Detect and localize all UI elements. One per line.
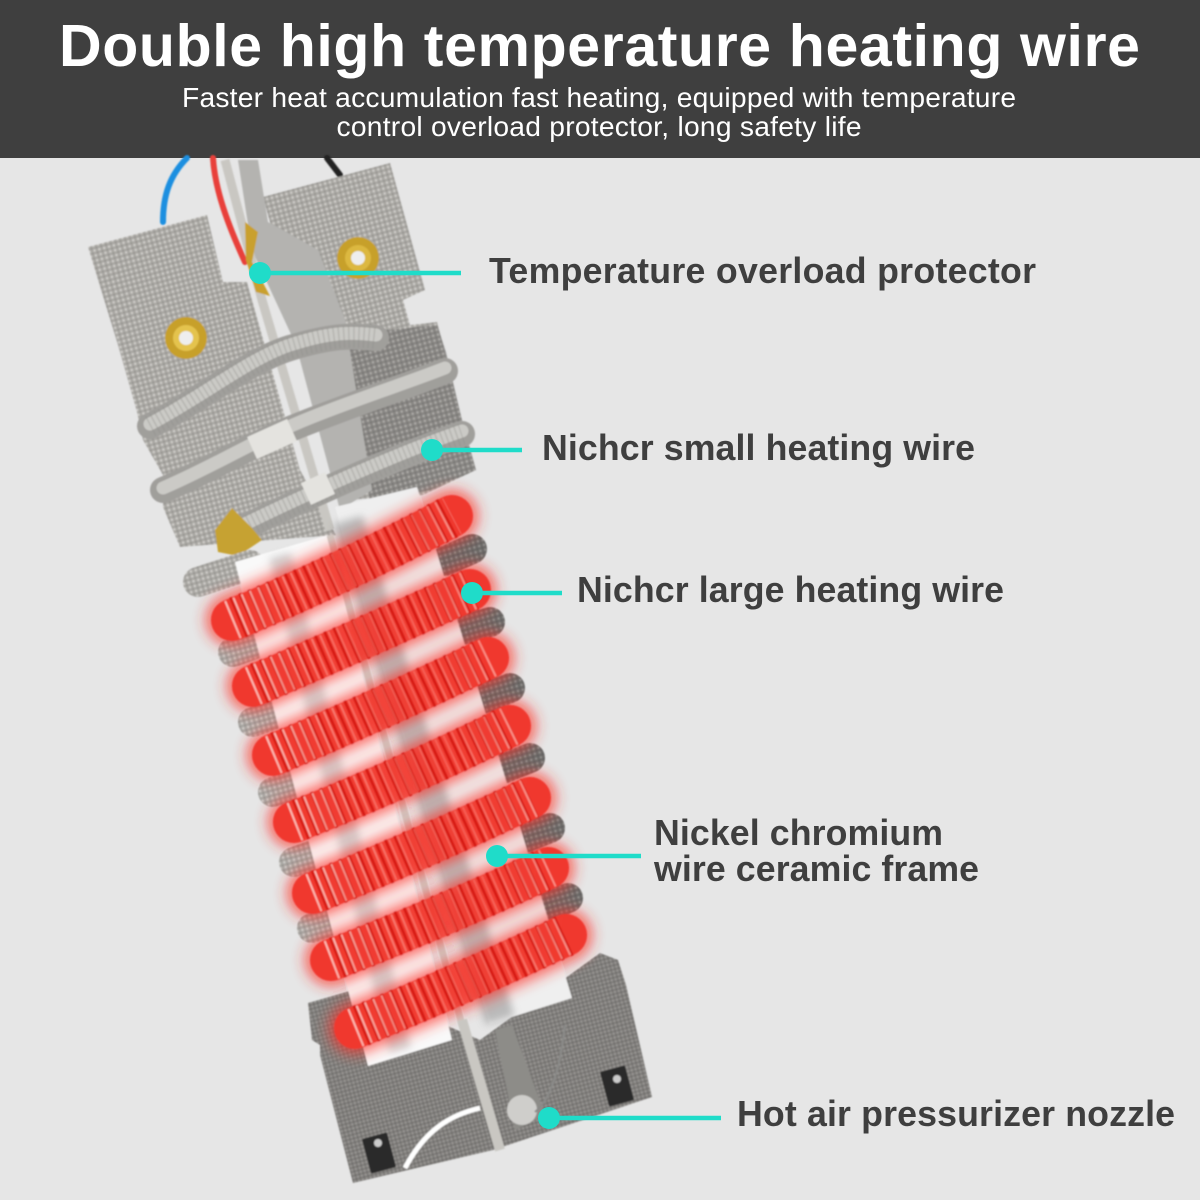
wires bbox=[163, 158, 340, 262]
header band bbox=[0, 0, 1200, 158]
subtitle: Faster heat accumulation fast heating, equipped with temperature bbox=[182, 81, 1016, 113]
brass nut bbox=[215, 508, 262, 556]
small heating wires bbox=[150, 333, 462, 527]
callout: temperature overload protector: Temperature overload protector bbox=[489, 251, 1036, 291]
callout: nozzle bbox=[538, 1094, 1175, 1134]
nickel-chromium coils bbox=[232, 516, 566, 1028]
eyelet left bbox=[165, 317, 207, 359]
callout: small heating wire: Nichcr small heating wire bbox=[542, 428, 975, 468]
subtitle bbox=[182, 81, 1016, 142]
lower spine bbox=[462, 1020, 500, 1150]
callout: nozzle: Hot air pressurizer nozzle bbox=[737, 1094, 1175, 1134]
terminal right bbox=[600, 1065, 634, 1107]
callout: ceramic frame: wire ceramic frame bbox=[653, 849, 979, 889]
terminal left bbox=[362, 1132, 396, 1174]
callout: large heating wire: Nichcr large heating wire bbox=[577, 570, 1004, 610]
spine bbox=[225, 160, 330, 530]
heating element illustration bbox=[88, 158, 652, 1183]
callout: ceramic frame bbox=[486, 813, 979, 889]
top metal plate bbox=[88, 163, 476, 547]
left fins bbox=[198, 565, 355, 928]
subtitle: control overload protector, long safety life bbox=[336, 110, 862, 142]
eyelet right bbox=[337, 237, 379, 279]
pressurizer nozzle bbox=[495, 1025, 565, 1130]
bottom metal plate bbox=[308, 953, 652, 1183]
callout: ceramic frame: Nickel chromium bbox=[654, 813, 943, 853]
right fins bbox=[445, 549, 568, 910]
callout: temperature overload protector bbox=[249, 251, 1036, 291]
ceramic frame bbox=[235, 487, 572, 1066]
centre tube bbox=[238, 160, 372, 510]
title: Double high temperature heating wire bbox=[59, 13, 1140, 79]
white wire bbox=[405, 1108, 480, 1168]
brass connector bbox=[245, 222, 270, 296]
